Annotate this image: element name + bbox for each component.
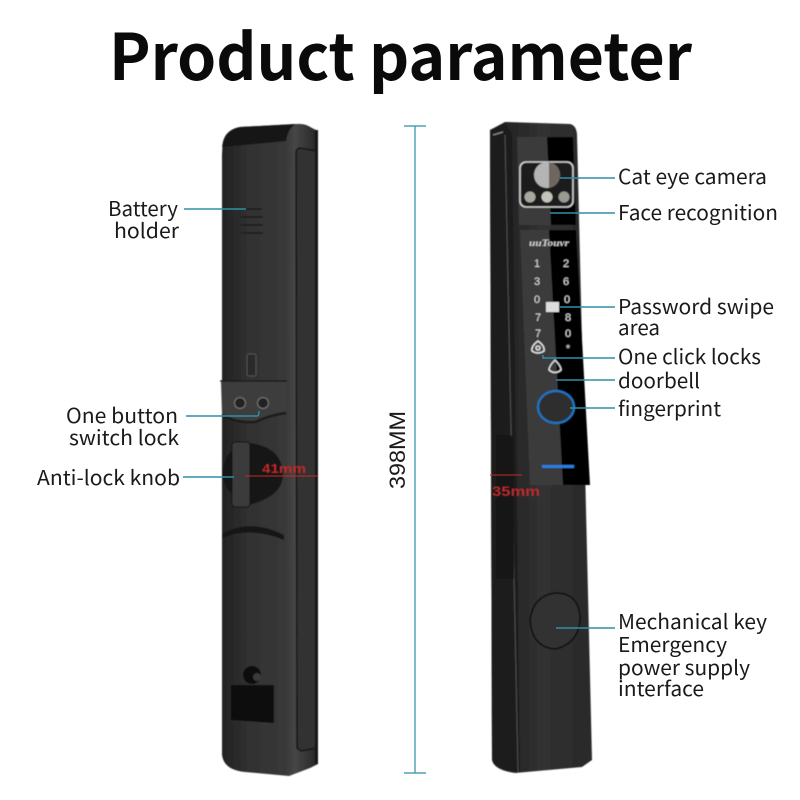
card swipe icon [546, 302, 559, 312]
label: one click locks [543, 340, 761, 370]
square port [231, 685, 274, 723]
front view of lock [490, 122, 592, 773]
doorbell icon [549, 360, 561, 372]
label: mechanical key [556, 605, 767, 702]
label: mechanical key: Emergency [618, 628, 727, 658]
label: anti-lock knob: Anti-lock knob [37, 461, 180, 491]
side latch [496, 435, 514, 579]
keypad digits: 0 [564, 294, 570, 306]
label: one click locks: One click locks [618, 340, 761, 370]
keypad digits: 3 [534, 276, 540, 288]
label: mechanical key: power supply [618, 651, 750, 681]
label: password swipe area [560, 290, 774, 341]
dimension: knob depth: 41mm [262, 461, 306, 476]
keypad digits: 7 [535, 312, 541, 324]
lock icon [532, 341, 544, 353]
label: battery holder: holder [114, 214, 179, 244]
label: password swipe area: Password swipe [618, 290, 774, 320]
keypad digits: 1 [534, 258, 540, 270]
label: doorbell: doorbell [618, 364, 700, 394]
keypad panel [520, 230, 589, 485]
dimension: height 398MM [385, 126, 426, 773]
lower plate [222, 526, 284, 540]
label: battery holder: Battery [108, 192, 178, 222]
keypad digits: 0 [565, 328, 571, 340]
label: one button switch lock: switch lock [69, 421, 180, 451]
battery holder vents [241, 209, 263, 233]
keypad digits: 2 [563, 258, 569, 270]
fingerprint ring [538, 391, 574, 423]
label: battery holder [108, 192, 246, 244]
key cover [530, 593, 580, 649]
label: cat eye camera: Cat eye camera [618, 160, 767, 190]
dimension: front depth [490, 475, 540, 499]
dimension: knob depth [245, 461, 318, 476]
label: mechanical key: Mechanical key [618, 605, 767, 635]
label: one button switch lock: One button [66, 399, 178, 429]
back body [222, 124, 318, 776]
label: face recognition: Face recognition [618, 196, 778, 226]
camera module [520, 160, 573, 207]
keypad digits: * [566, 343, 571, 355]
keypad digits: 6 [563, 276, 569, 288]
side rail [296, 148, 317, 751]
label: mechanical key: interface [618, 672, 704, 702]
battery icon [247, 354, 256, 376]
keypad digits [534, 258, 571, 355]
switch buttons [234, 398, 268, 408]
battery cover [221, 381, 287, 421]
knob [222, 442, 283, 507]
brand: uuTouvr [529, 238, 570, 248]
keypad digits: 7 [535, 328, 541, 340]
title: Product parameter [109, 7, 692, 99]
dimension: front depth: 35mm [492, 483, 540, 499]
label: one button switch lock [66, 399, 259, 451]
keypad digits: 0 [534, 294, 540, 306]
label: password swipe area: area [618, 311, 660, 341]
label: fingerprint: fingerprint [618, 392, 721, 422]
upper glass panel [517, 137, 575, 225]
key hole [243, 666, 261, 684]
back view of lock [220, 124, 318, 776]
blue indicator [542, 465, 574, 468]
keypad digits: 8 [565, 312, 571, 324]
dimension: height 398MM: 398MM [385, 411, 410, 489]
front body [490, 122, 592, 773]
